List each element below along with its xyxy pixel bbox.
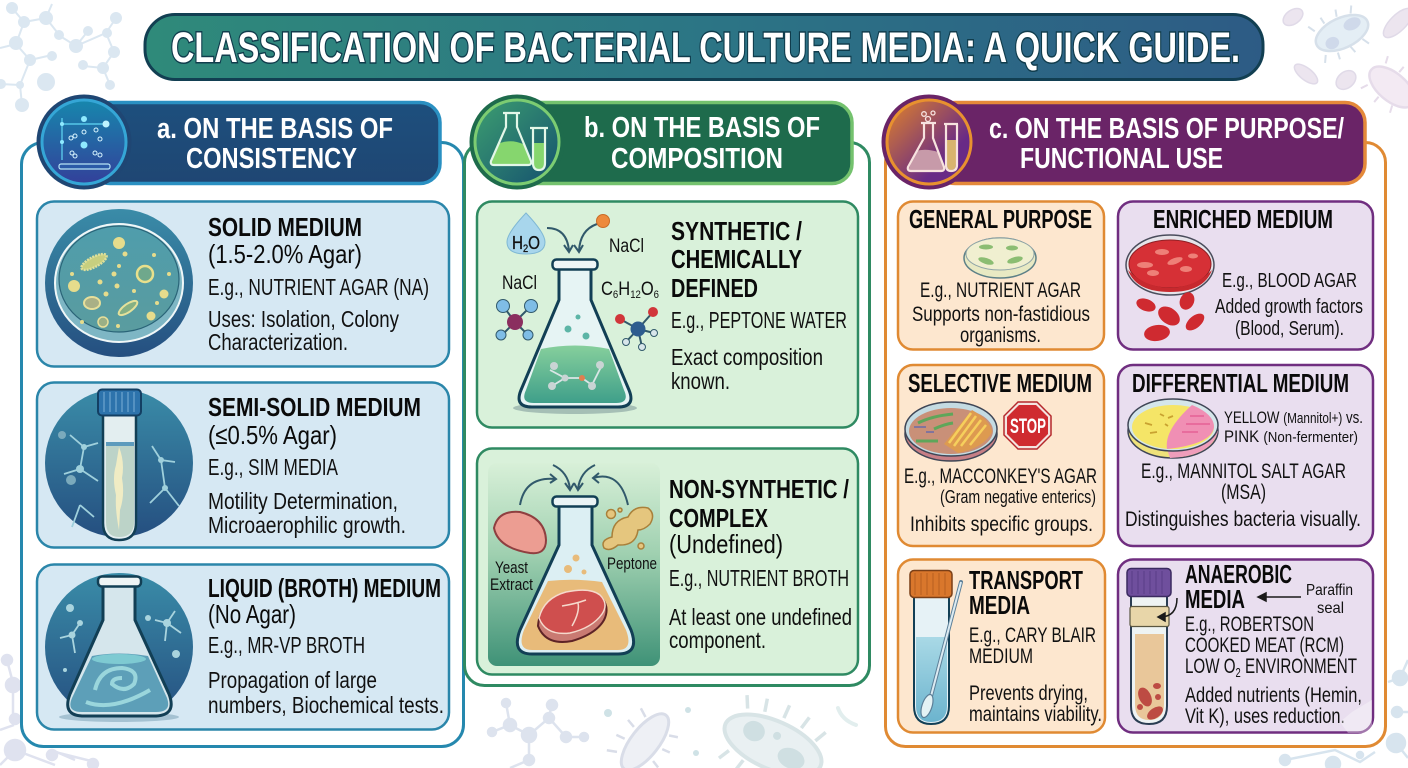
text: differential notes: YELLOW (Mannitol+) vs.: [1224, 408, 1363, 427]
text: non-synthetic medium: component.: [669, 627, 766, 653]
text: transport media: MEDIA: [969, 590, 1030, 620]
label: yeast: Yeast: [495, 558, 528, 577]
text: synthetic medium: [671, 216, 847, 394]
text: synthetic medium: SYNTHETIC /: [671, 216, 802, 246]
text: solid medium: SOLID MEDIUM: [208, 212, 362, 242]
text: semi-solid medium: SEMI-SOLID MEDIUM: [208, 392, 421, 422]
panel b header: [505, 102, 852, 184]
background bacterium: bottom centre large: [709, 685, 838, 768]
text: anaerobic media: ANAEROBIC: [1185, 559, 1292, 589]
text: general purpose body: organisms.: [960, 324, 1041, 347]
label: NaCl top: NaCl: [609, 236, 644, 257]
icon: left molecule: [496, 300, 538, 340]
label: glucose formula: H: [618, 279, 630, 300]
text: solid medium: (1.5-2.0% Agar): [208, 239, 362, 269]
heading b line 2: COMPOSITION: [611, 143, 783, 175]
text: semi-solid medium: Motility Determination,: [208, 488, 398, 514]
text: liquid medium: numbers, Biochemical tests.: [208, 692, 444, 718]
icon: broth flask: [45, 573, 193, 722]
card: semi-solid medium: [37, 382, 449, 548]
text: semi-solid medium: [208, 392, 421, 538]
icon: complex medium flask: [517, 496, 634, 654]
text: non-synthetic medium: NON-SYNTHETIC /: [669, 474, 849, 504]
text: solid medium: [208, 212, 429, 355]
icon: agar plate with microbes: [36, 94, 132, 190]
text: selective heading: SELECTIVE MEDIUM: [908, 368, 1092, 398]
background squiggle: [838, 708, 856, 725]
text: non-synthetic medium: (Undefined): [669, 529, 783, 559]
arrows into flask: [547, 224, 597, 252]
panel c header: [935, 102, 1365, 184]
text: transport media: maintains viability.: [969, 703, 1102, 726]
text: solid medium: Uses: Isolation, Colony: [208, 306, 399, 332]
arrow: paraffin seal: [1258, 593, 1301, 601]
text: general purpose body: [912, 279, 1090, 347]
text: anaerobic media: COOKED MEAT (RCM): [1185, 634, 1344, 657]
text: liquid medium: LIQUID (BROTH) MEDIUM: [208, 573, 441, 603]
panel a frame: [22, 142, 464, 746]
text: general purpose body: E.g., NUTRIENT AGAR: [920, 279, 1081, 302]
text: general purpose body: Supports non-fastidious: [912, 303, 1090, 326]
icon: stop sign: [1004, 402, 1051, 449]
arrows to flask: [520, 465, 628, 505]
label: paraffin seal: Paraffin: [1306, 582, 1353, 599]
card: anaerobic media: [1118, 559, 1373, 733]
heading b: b. ON THE BASIS OF: [584, 112, 820, 144]
card: solid medium: [37, 202, 449, 366]
card: general purpose: [898, 202, 1104, 350]
text: anaerobic media: 2: [1236, 665, 1241, 680]
text: liquid medium: Propagation of large: [208, 667, 377, 693]
background bacterium: bottom centre small: [603, 699, 686, 768]
text: synthetic medium: known.: [671, 368, 730, 394]
label: glucose formula: C: [601, 279, 615, 300]
text: semi-solid medium: E.g., SIM MEDIA: [208, 454, 338, 480]
text: differential notes: PINK (Non-fermenter): [1224, 427, 1358, 446]
icon: petri dish with colonies: [45, 209, 193, 357]
icon: macconkey dish: [905, 402, 997, 461]
label: glucose formula: 6: [613, 289, 618, 301]
panel a header: [90, 102, 440, 184]
icon: flask and tube with bubbles: [882, 94, 976, 190]
panel: b. composition: [464, 94, 870, 686]
icon: flask and test tube: [470, 94, 564, 190]
icon: stop sign: STOP: [1010, 415, 1046, 438]
background molecule: top left: [0, 3, 121, 111]
icon: mannitol salt agar dish: [1128, 399, 1218, 458]
label: paraffin seal: [1306, 582, 1353, 617]
text: transport media: MEDIUM: [969, 645, 1033, 668]
background molecule: bottom centre: [488, 699, 699, 768]
icon: semi-solid tube: [45, 389, 193, 540]
watermark sparkle: [1340, 700, 1372, 733]
heading a: a. ON THE BASIS OF: [157, 113, 393, 145]
panel: a. consistency: [22, 94, 464, 746]
icon: blood agar dish and red cells: [1126, 235, 1214, 343]
icon: defined medium flask: [513, 260, 637, 414]
icon: water drop H2O: [507, 213, 545, 255]
text: selective body: E.g., MACCONKEY'S AGAR: [904, 465, 1097, 488]
text: transport media: [969, 565, 1102, 726]
text: non-synthetic medium: At least one undefined: [669, 604, 852, 630]
text: transport media: TRANSPORT: [969, 565, 1083, 595]
icon: right molecule: [615, 307, 658, 350]
heading c line 2: FUNCTIONAL USE: [1020, 143, 1223, 175]
text: non-synthetic medium: [669, 474, 852, 653]
callout: seal pointer: [1158, 598, 1177, 621]
label: extract: Extract: [490, 575, 533, 594]
text: non-synthetic medium: COMPLEX: [669, 503, 768, 533]
icon: transport tube with swab: [910, 570, 961, 724]
icon: peptone blob: [603, 507, 653, 549]
background bacteria: top right: [1280, 0, 1408, 122]
card: transport media: [898, 560, 1105, 732]
label: glucose formula: 6: [654, 289, 659, 301]
text: synthetic medium: CHEMICALLY: [671, 244, 802, 274]
card: liquid broth medium: [37, 564, 449, 730]
text: semi-solid medium: (≤0.5% Agar): [208, 420, 337, 450]
card: synthetic medium: [477, 202, 858, 428]
icon: anaerobic tube: [1127, 568, 1171, 724]
icon: water drop H2O: O: [528, 233, 540, 253]
text: synthetic medium: DEFINED: [671, 273, 758, 303]
text: liquid medium: [208, 573, 444, 718]
text: enriched body: (Blood, Serum).: [1235, 318, 1344, 340]
heading a line 2: CONSISTENCY: [186, 143, 357, 175]
text: differential body: (MSA): [1221, 481, 1266, 504]
text: liquid medium: (No Agar): [208, 599, 296, 629]
text: enriched heading: ENRICHED MEDIUM: [1153, 204, 1333, 234]
card: differential medium: [1118, 365, 1373, 546]
card: non-synthetic medium: [477, 448, 858, 674]
text: synthetic medium: Exact composition: [671, 344, 823, 370]
text: anaerobic media: ENVIRONMENT: [1241, 655, 1357, 678]
text: general purpose heading: GENERAL PURPOSE: [909, 204, 1092, 234]
label: paraffin seal: seal: [1317, 600, 1344, 617]
text: anaerobic media: [1185, 559, 1362, 728]
panel b frame: [464, 142, 870, 686]
title banner: [145, 14, 1263, 80]
icon: water drop H2O: H: [512, 233, 525, 253]
text: enriched body: [1215, 270, 1363, 340]
icon: orange ion: [596, 214, 610, 228]
text: anaerobic media: MEDIA: [1185, 584, 1245, 614]
text: non-synthetic medium: E.g., NUTRIENT BROTH: [669, 565, 849, 591]
card: selective medium: [898, 365, 1104, 546]
text: semi-solid medium: Microaerophilic growth.: [208, 512, 406, 538]
text: liquid medium: E.g., MR-VP BROTH: [208, 632, 365, 658]
text: transport media: E.g., CARY BLAIR: [969, 624, 1096, 647]
text: selective body: Inhibits specific groups.: [910, 513, 1093, 536]
icon: water drop H2O: 2: [523, 243, 528, 255]
background molecule: lower right: [1280, 660, 1408, 768]
illustration background: [488, 463, 660, 666]
text: differential body: Distinguishes bacteria visually.: [1125, 508, 1361, 531]
background molecule: lower left: [0, 655, 98, 768]
icon: nutrient agar dish: [964, 238, 1036, 278]
icon: yeast extract chunk: [494, 512, 546, 553]
text: anaerobic media: Added nutrients (Hemin,: [1185, 684, 1362, 707]
text: selective body: [904, 465, 1097, 536]
panel c frame: [886, 142, 1386, 746]
card: enriched medium: [1118, 202, 1373, 350]
text: selective body: (Gram negative enterics): [940, 487, 1096, 507]
text: anaerobic media: LOW O: [1185, 655, 1255, 678]
panel: c. purpose: [882, 94, 1386, 746]
label: glucose formula: O: [641, 279, 654, 300]
text: transport media: Prevents drying,: [969, 682, 1088, 705]
text: solid medium: E.g., NUTRIENT AGAR (NA): [208, 274, 429, 300]
text: differential notes: [1224, 408, 1363, 446]
text: enriched body: E.g., BLOOD AGAR: [1222, 270, 1357, 292]
text: anaerobic media: Vit K), uses reduction.: [1185, 705, 1345, 728]
label: peptone: Peptone: [607, 554, 657, 573]
label: glucose formula: 12: [630, 289, 641, 301]
text: enriched body: Added growth factors: [1215, 296, 1363, 318]
text: anaerobic media: E.g., ROBERTSON: [1185, 613, 1314, 636]
text: solid medium: Characterization.: [208, 329, 348, 355]
text: differential body: [1125, 460, 1361, 531]
label: NaCl left: NaCl: [502, 273, 537, 294]
text: synthetic medium: E.g., PEPTONE WATER: [671, 307, 847, 333]
